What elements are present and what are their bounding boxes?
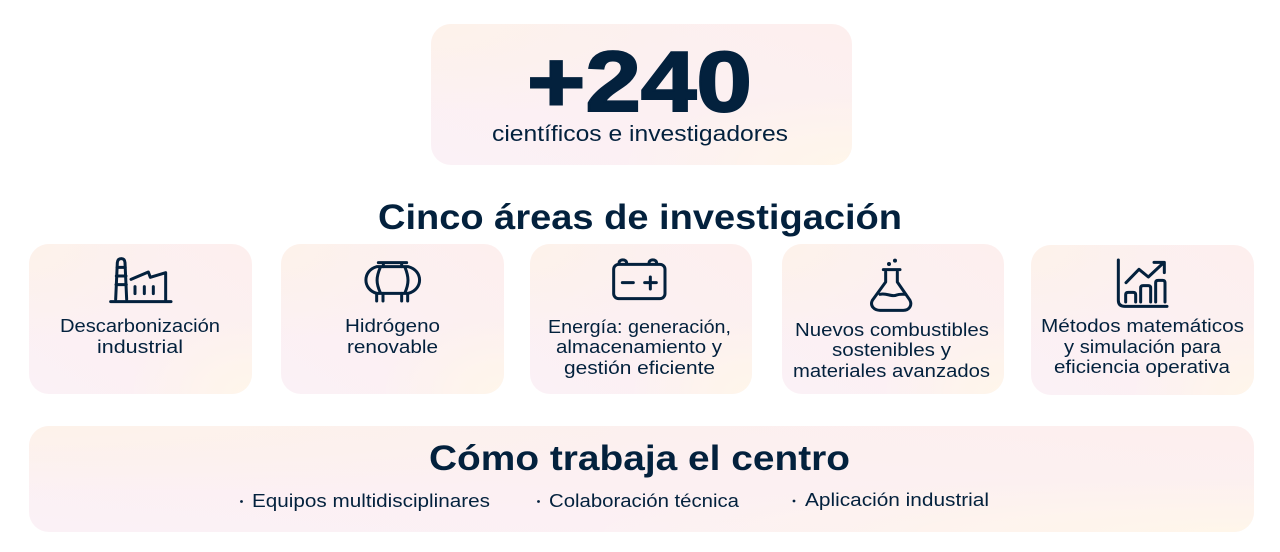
- label: renovable: [347, 337, 438, 357]
- label: sostenibles y: [832, 340, 951, 360]
- label: Energía: generación,: [548, 317, 731, 337]
- label: [548, 317, 731, 378]
- list item: multidisciplinary teams: Equipos multidisciplinares: [252, 491, 490, 511]
- label: Nuevos combustibles: [795, 320, 989, 340]
- label: y simulación para: [1064, 337, 1222, 357]
- label: eficiencia operativa: [1054, 357, 1231, 377]
- label: Descarbonización: [60, 316, 220, 336]
- list item: technical collaboration: Colaboración técnica: [549, 491, 740, 511]
- icon: battery: [614, 260, 665, 299]
- label: gestión eficiente: [564, 358, 715, 378]
- label: Hidrógeno: [345, 316, 440, 336]
- panel: new fuels and materials: [782, 244, 1004, 394]
- label: Métodos matemáticos: [1041, 316, 1244, 336]
- panel: industrial decarbonization: [29, 244, 252, 394]
- panel: energy: [530, 244, 752, 394]
- big number: +240: [527, 35, 752, 130]
- label: industrial: [97, 337, 183, 357]
- stat caption: científicos e investigadores: [492, 121, 788, 146]
- label: [60, 316, 220, 357]
- panel: headline stat: [431, 24, 852, 165]
- label: [345, 316, 440, 357]
- panel: how the centre works: [29, 426, 1254, 532]
- icon: growth chart: [1118, 260, 1167, 306]
- panel: mathematical methods: [1031, 245, 1254, 395]
- icon: flask: [872, 259, 911, 310]
- heading: research areas: Cinco áreas de investigación: [378, 198, 902, 237]
- label: [793, 320, 990, 381]
- label: materiales avanzados: [793, 361, 990, 381]
- label: almacenamiento y: [556, 337, 722, 357]
- panel: renewable hydrogen: [281, 244, 504, 394]
- icon: factory: [111, 259, 171, 302]
- heading: how the centre works: Cómo trabaja el centro: [429, 439, 850, 478]
- icon: hydrogen tank: [366, 263, 420, 301]
- list item: industrial application: Aplicación industrial: [805, 490, 989, 510]
- label: [1041, 316, 1244, 377]
